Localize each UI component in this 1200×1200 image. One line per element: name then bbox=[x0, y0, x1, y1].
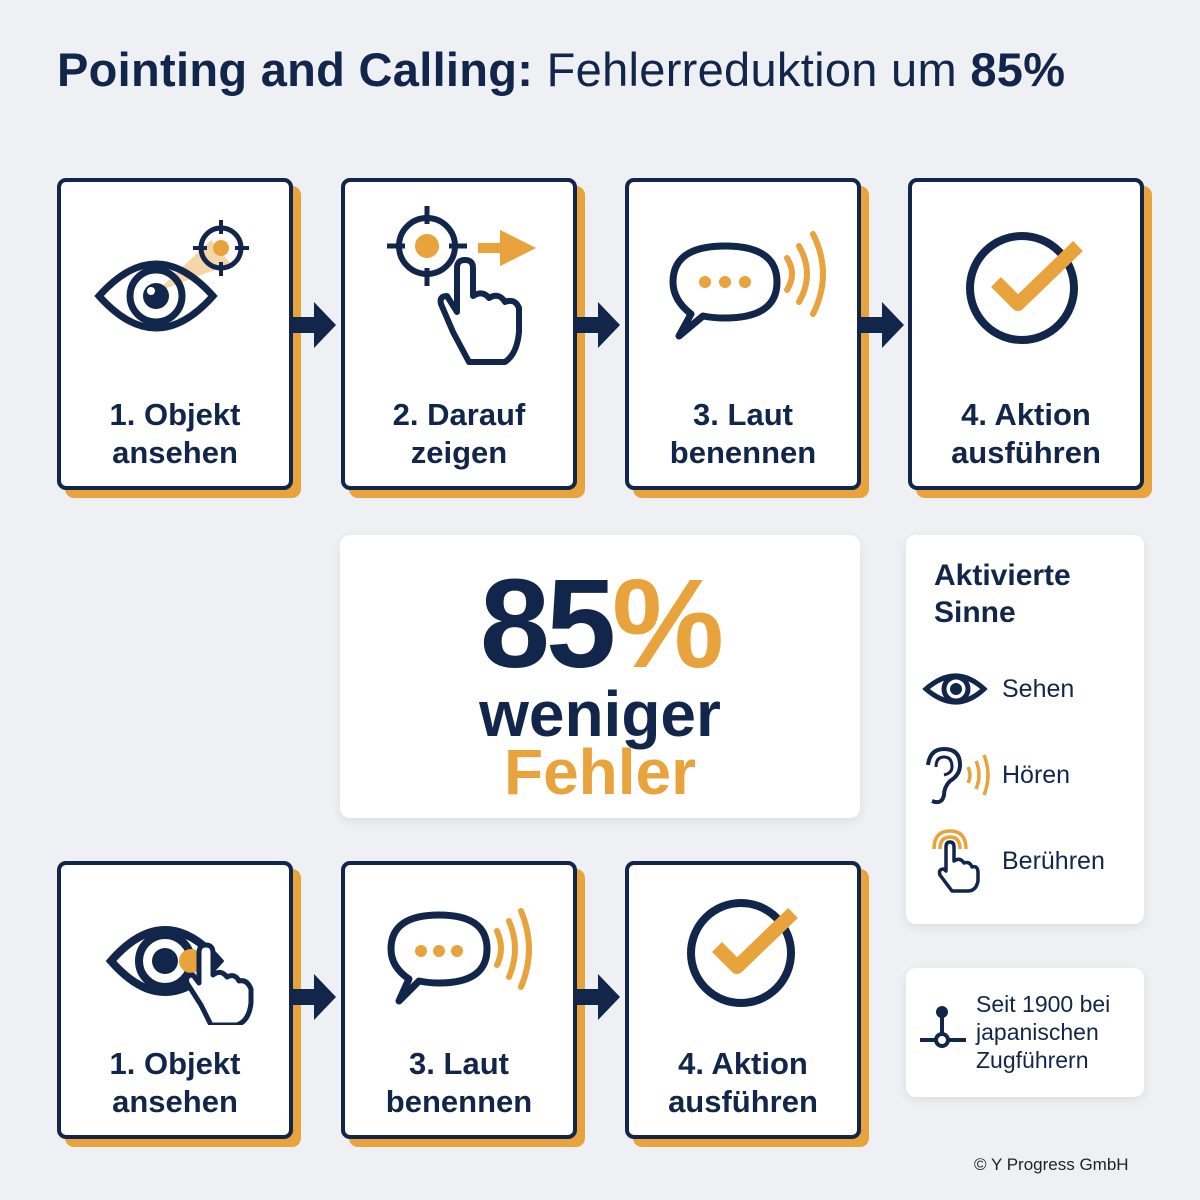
stat caption: Fehler bbox=[504, 736, 696, 808]
note text: Seit 1900 bei bbox=[976, 991, 1110, 1017]
card: 3. Laut benennen (top): 3. Laut bbox=[693, 397, 793, 432]
icon: eye with target bbox=[94, 220, 249, 332]
icon: check circle bbox=[687, 899, 798, 1007]
legend: Hören bbox=[926, 747, 1070, 804]
card: 3. Laut benennen (top) bbox=[625, 178, 861, 490]
copyright: © Y Progress GmbH bbox=[974, 1155, 1129, 1174]
card: 4. Aktion ausführen (bottom) bbox=[625, 861, 861, 1139]
arrow 5 bbox=[577, 974, 620, 1020]
big stat: 85% bbox=[480, 553, 720, 694]
icon: target with pointing hand bbox=[387, 206, 536, 365]
note text bbox=[975, 991, 1110, 1073]
note text: Zugführern bbox=[976, 1047, 1089, 1073]
arrow 4 bbox=[293, 974, 336, 1020]
card: 4. Aktion ausführen (top): ausführen bbox=[951, 435, 1101, 470]
card: 1. Objekt ansehen (top): 1. Objekt bbox=[110, 397, 240, 432]
card: 4. Aktion ausführen (bottom): 4. Aktion bbox=[678, 1046, 808, 1081]
icon: speech bubble bbox=[388, 908, 532, 1004]
card: 4. Aktion ausführen (bottom): ausführen bbox=[668, 1084, 818, 1119]
title: Pointing and Calling: Fehlerreduktion um 85% bbox=[57, 43, 1065, 96]
card: 2. Darauf zeigen: zeigen bbox=[411, 435, 507, 470]
card: 4. Aktion ausführen (top): 4. Aktion bbox=[961, 397, 1091, 432]
icon: rail junction bbox=[920, 1006, 966, 1048]
panel: 85% weniger Fehler bbox=[340, 535, 860, 818]
card: 1. Objekt ansehen (bottom): ansehen bbox=[112, 1084, 238, 1119]
legend: Berühren: Berühren bbox=[1002, 847, 1105, 875]
arrow 2 bbox=[577, 302, 620, 348]
arrow 1 bbox=[293, 302, 336, 348]
card: 1. Objekt ansehen (top): ansehen bbox=[112, 435, 238, 470]
card: 4. Aktion ausführen (top) bbox=[908, 178, 1144, 490]
note text: japanischen bbox=[976, 1019, 1099, 1045]
panel: history note bbox=[906, 968, 1144, 1097]
legend: Sehen bbox=[922, 673, 1074, 705]
card: 1. Objekt ansehen (bottom) bbox=[57, 861, 293, 1139]
legend heading bbox=[934, 559, 1071, 629]
card: 2. Darauf zeigen: 2. Darauf bbox=[393, 397, 525, 432]
card: 3. Laut benennen (top): benennen bbox=[670, 435, 816, 470]
icon: speech bubble bbox=[670, 231, 826, 340]
icon: eye with touching hand bbox=[106, 926, 254, 1025]
legend: Berühren bbox=[932, 829, 1105, 893]
card: 3. Laut benennen (bottom): 3. Laut bbox=[409, 1046, 509, 1081]
card: 3. Laut benennen (bottom) bbox=[341, 861, 577, 1139]
panel: Aktivierte Sinne bbox=[906, 535, 1144, 924]
legend: Sehen: Sehen bbox=[1002, 675, 1074, 703]
legend: Hören: Hören bbox=[1002, 761, 1070, 789]
card: 3. Laut benennen (bottom): benennen bbox=[386, 1084, 532, 1119]
legend heading: Aktivierte bbox=[934, 559, 1071, 592]
stat caption bbox=[479, 678, 721, 808]
arrow 3 bbox=[861, 302, 904, 348]
card: 2. Darauf zeigen bbox=[341, 178, 577, 490]
legend heading: Sinne bbox=[934, 596, 1016, 629]
card: 1. Objekt ansehen (top) bbox=[57, 178, 293, 490]
stat caption: weniger bbox=[479, 678, 721, 750]
card: 1. Objekt ansehen (bottom): 1. Objekt bbox=[110, 1046, 240, 1081]
icon: check circle bbox=[966, 232, 1083, 344]
